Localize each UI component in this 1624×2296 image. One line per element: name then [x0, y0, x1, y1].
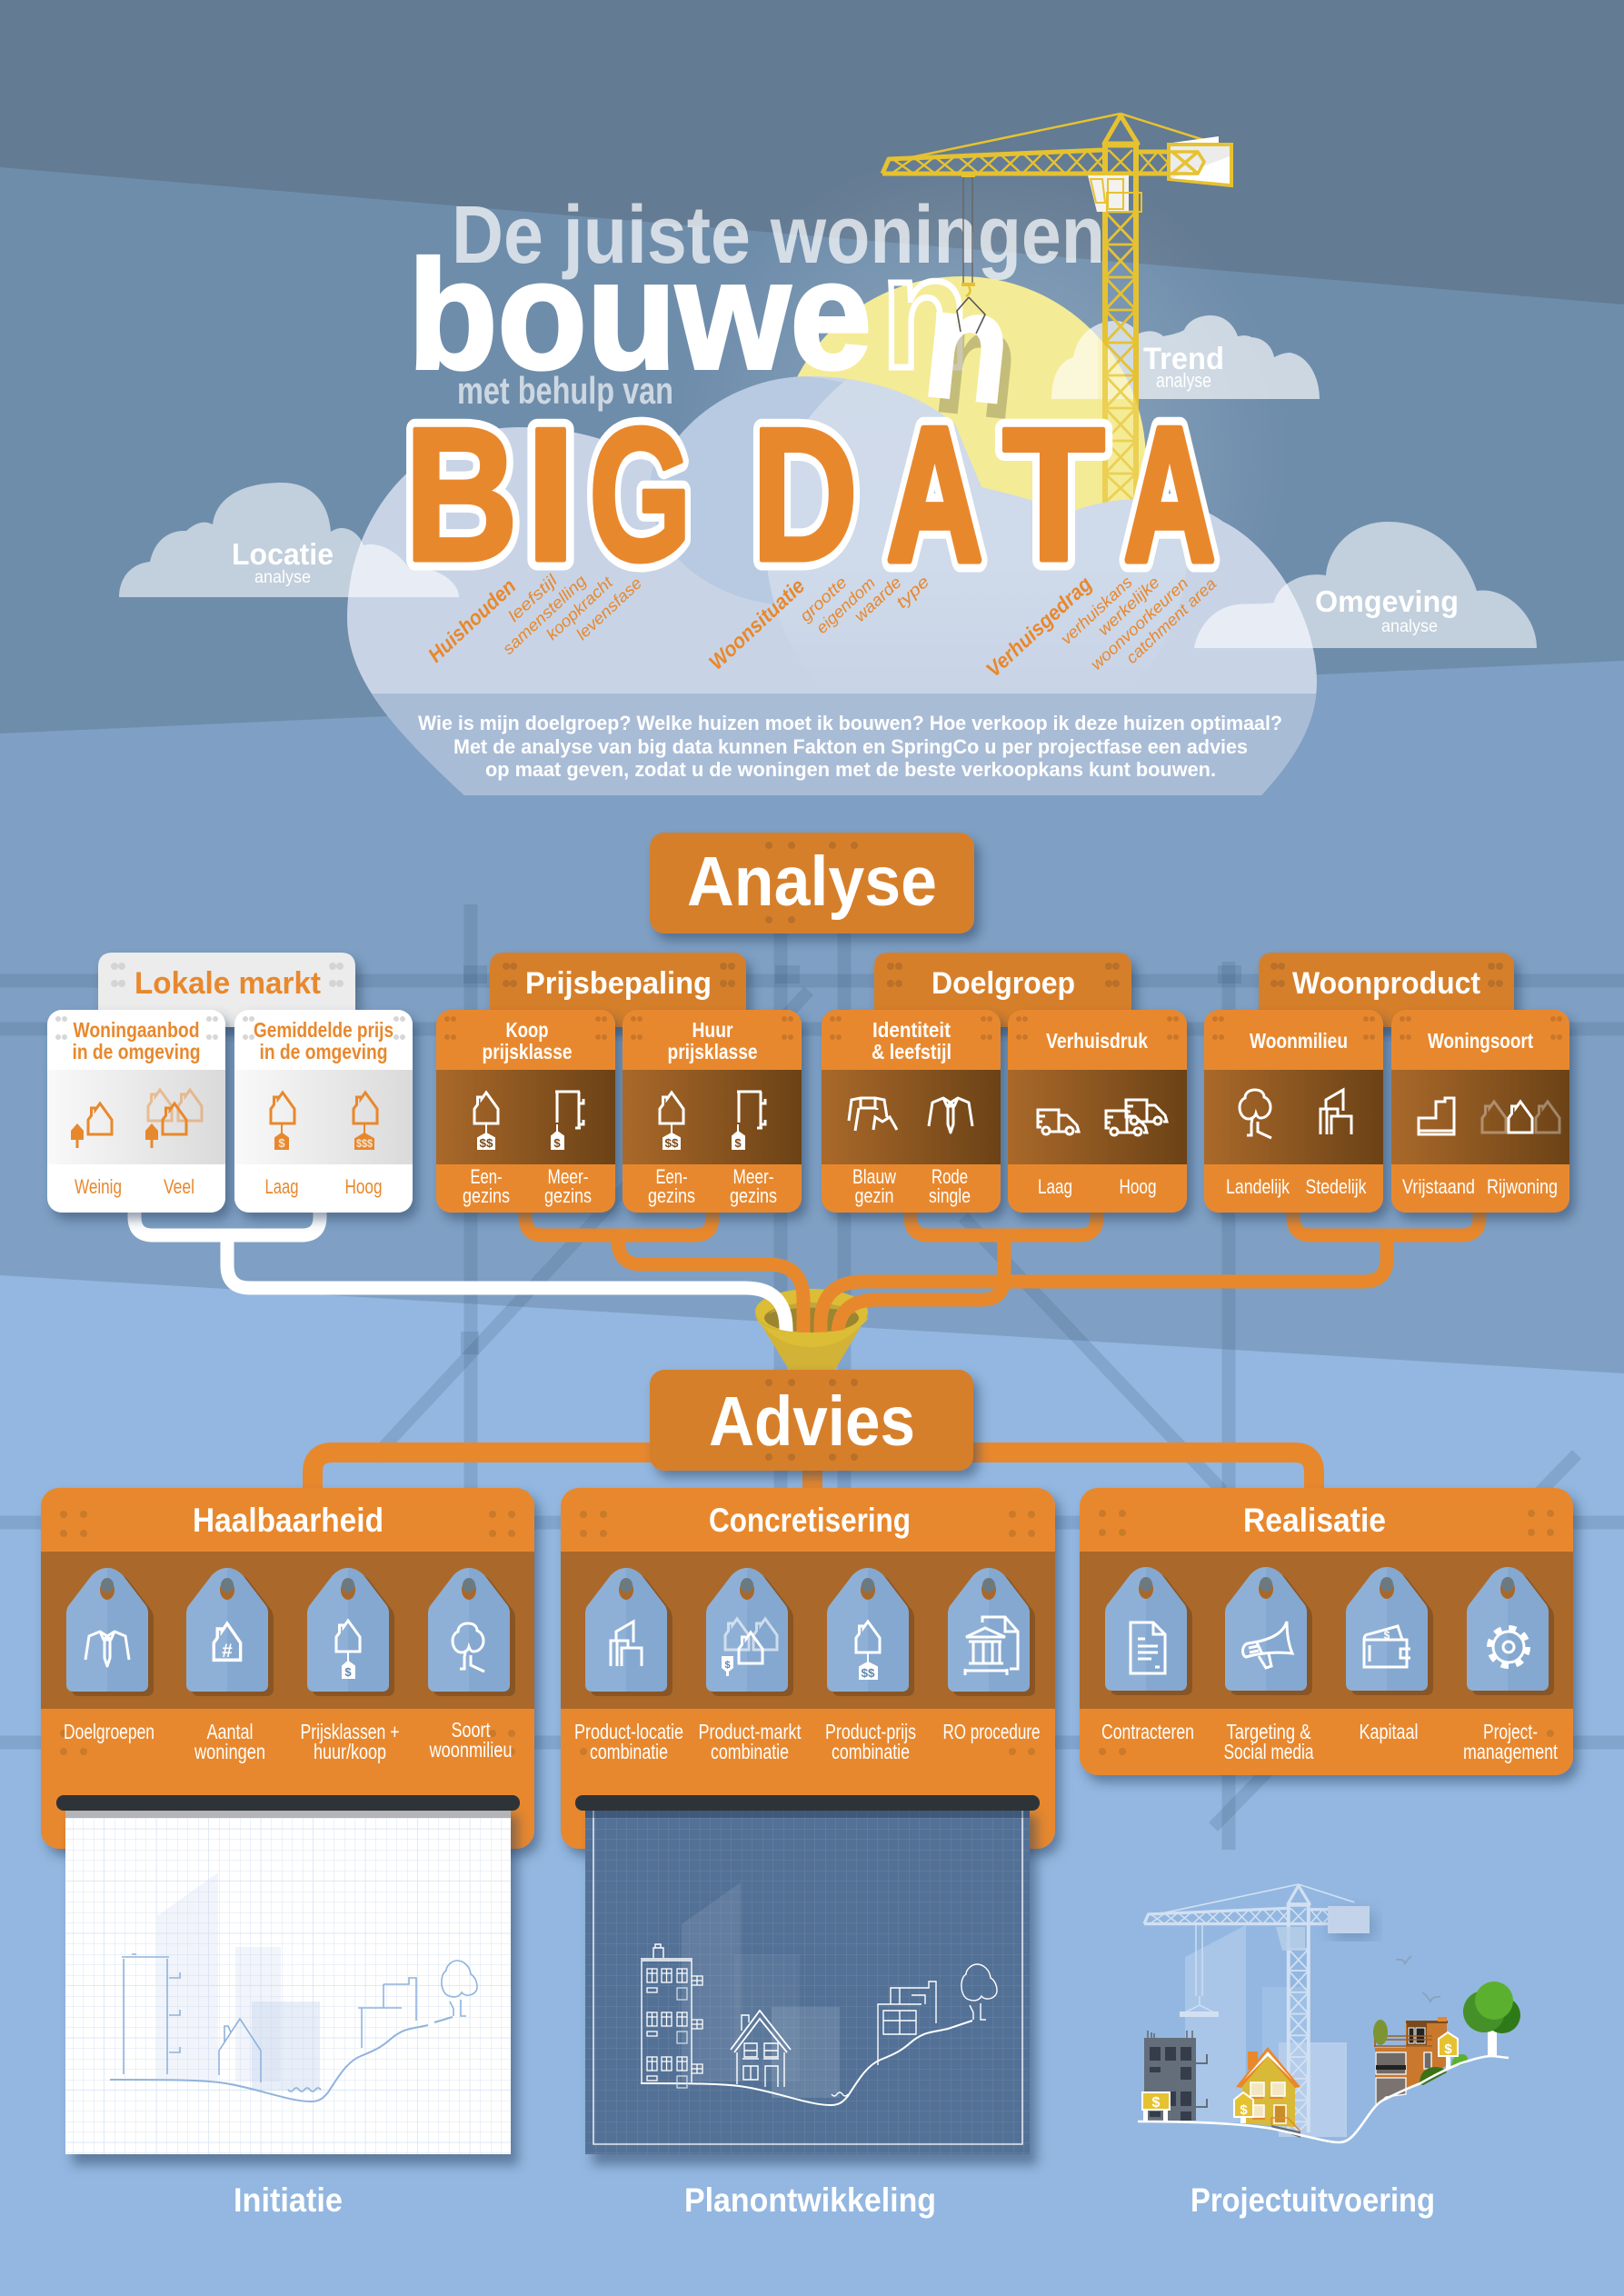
word cloud: huishouden: koopkracht — [543, 573, 617, 644]
sketch shadows — [157, 1872, 281, 2081]
tag: product-markt: $ — [724, 1660, 731, 1671]
card: verhuisdruk: Verhuisdruk — [1046, 1029, 1148, 1053]
phase label: initiatie: Initiatie — [234, 2181, 343, 2219]
panel: realisatie: Social media — [1223, 1740, 1314, 1763]
cloud: omgeving — [1194, 522, 1537, 648]
tag: kapitaal — [1346, 1567, 1433, 1695]
title line: bouwen: bouwe — [408, 229, 872, 402]
crane cabin — [1088, 175, 1129, 212]
tag: prijsklassen — [307, 1568, 394, 1696]
phase label: projectuitvoering: Projectuitvoering — [1191, 2181, 1435, 2219]
big cloud — [347, 376, 1317, 795]
card: huur prijsklasse — [623, 1010, 802, 1213]
icon: multi family price — [552, 1092, 583, 1150]
word cloud: verhuisgedrag: verhuiskans — [1057, 573, 1136, 648]
pipe: prijsbepaling — [525, 1213, 803, 1334]
card: verhuisdruk: Laag — [1038, 1175, 1072, 1198]
BIG DATA: D — [752, 389, 858, 601]
balcony shrub — [1373, 2020, 1388, 2045]
word cloud: woonsituatie: Woonsituatie — [704, 574, 810, 674]
card: huur prijsklasse: Huur — [692, 1018, 733, 1042]
card: huur prijsklasse: gezins — [648, 1184, 695, 1207]
cloud: locatie: analyse — [254, 568, 311, 587]
word cloud: verhuisgedrag: woonvoorkeuren — [1087, 574, 1191, 674]
word cloud: woonsituatie: waarde — [851, 573, 905, 625]
tag: RO procedure — [948, 1568, 1035, 1696]
tab: woonproduct — [1259, 953, 1514, 1027]
card: huur prijsklasse: Meer- — [732, 1165, 774, 1188]
card: gemiddelde prijs: Hoog — [345, 1175, 382, 1198]
word cloud: verhuisgedrag: werkelijke — [1094, 573, 1163, 639]
panel: concretisering — [561, 1488, 1055, 1849]
tab: prijsbepaling — [490, 953, 746, 1027]
card: koop prijsklasse: Koop — [505, 1018, 549, 1042]
word cloud: woonsituatie: eigendom — [812, 574, 879, 637]
panel: haalbaarheid: Prijsklassen + — [300, 1720, 400, 1743]
BIG DATA — [404, 389, 1215, 601]
cloud: omgeving: analyse — [1381, 617, 1438, 636]
panel: concretisering: Concretisering — [709, 1502, 911, 1539]
card: koop prijsklasse: prijsklasse — [482, 1040, 573, 1063]
label: trend analyse: Trend — [1143, 342, 1224, 376]
panel: haalbaarheid: woningen — [194, 1740, 265, 1763]
pipe: lokale markt — [135, 1213, 786, 1333]
pipe: doelgroep — [838, 1213, 1097, 1334]
bushes — [1420, 2067, 1447, 2085]
tab: doelgroep: Doelgroep — [932, 966, 1075, 1001]
label: trend analyse: analyse — [1156, 369, 1211, 392]
card: huur prijsklasse: Een- — [656, 1165, 687, 1188]
card: identiteit en leefstijl: Identiteit — [872, 1018, 951, 1042]
card: gemiddelde prijs: Gemiddelde prijs — [254, 1018, 394, 1042]
BIG DATA: I — [525, 389, 576, 601]
BIG DATA: T — [1002, 389, 1105, 601]
tag: product-prijs — [827, 1568, 914, 1696]
BIG DATA: A — [887, 389, 982, 601]
ghost buildings — [1185, 1925, 1246, 2122]
panel: concretisering: combinatie — [590, 1740, 668, 1763]
panel: haalbaarheid: Aantal — [207, 1720, 253, 1743]
card: gemiddelde prijs: in de omgeving — [260, 1040, 387, 1063]
panel: realisatie: Realisatie — [1243, 1502, 1386, 1539]
word cloud: woonsituatie: type — [892, 573, 932, 612]
card: koop prijsklasse — [436, 1010, 615, 1213]
panel: concretisering: combinatie — [711, 1740, 789, 1763]
word cloud: huishouden: levensfase — [573, 574, 645, 644]
tag: doelgroepen — [66, 1568, 154, 1696]
subtitle: met behulp van: met behulp van — [457, 369, 673, 412]
sheet: planontwikkeling blueprint — [575, 1795, 1040, 2154]
tag: product-markt — [706, 1568, 793, 1696]
card: identiteit en leefstijl: gezin — [854, 1184, 894, 1207]
icon: multi family rent — [732, 1092, 765, 1150]
icon: terraced houses — [1482, 1102, 1559, 1133]
card: verhuisdruk: Hoog — [1120, 1175, 1156, 1198]
word cloud: verhuisgedrag: catchment area — [1122, 574, 1220, 667]
tag: targeting — [1225, 1567, 1312, 1695]
BIG DATA: G — [589, 389, 692, 601]
panel: haalbaarheid — [41, 1488, 534, 1849]
pale crane — [1144, 1884, 1354, 2141]
phase label: planontwikkeling: Planontwikkeling — [684, 2181, 936, 2219]
word cloud: verhuisgedrag — [981, 572, 1220, 682]
tab: woonproduct: Woonproduct — [1292, 966, 1480, 1001]
hanging letter n with shadow: n — [916, 255, 1020, 437]
green tree — [1463, 1982, 1520, 2056]
card: woningaanbod: in de omgeving — [73, 1040, 200, 1063]
icon: single family price — [474, 1093, 498, 1150]
panel: realisatie: Targeting & — [1227, 1720, 1310, 1743]
card: huur prijsklasse: prijsklasse — [667, 1040, 758, 1063]
panel: realisatie: Kapitaal — [1360, 1720, 1418, 1743]
tab: prijsbepaling: Prijsbepaling — [525, 966, 712, 1001]
tag: aantal woningen — [186, 1568, 274, 1696]
tab: doelgroep — [874, 953, 1131, 1027]
tag: soort woonmilieu — [428, 1568, 515, 1696]
tag: product-locatie — [585, 1568, 673, 1696]
icon: detached house — [1419, 1098, 1454, 1134]
BIG DATA: T — [1002, 389, 1105, 601]
card: woningaanbod — [47, 1010, 225, 1213]
panel: concretisering: RO procedure — [943, 1720, 1040, 1743]
tag: kapitaal: $ — [1384, 1629, 1390, 1642]
icon: low price house — [271, 1093, 294, 1150]
card: woningaanbod: Woningaanbod — [73, 1018, 200, 1042]
card: koop prijsklasse: Meer- — [547, 1165, 589, 1188]
cloud: trend — [1051, 315, 1320, 399]
panel: haalbaarheid: Soort — [451, 1718, 491, 1742]
icon: many houses — [145, 1090, 202, 1148]
card: identiteit en leefstijl — [822, 1010, 1001, 1213]
intro paragraph: op maat geven, zodat u de woningen met de beste verkoopkans kunt bouwen. — [485, 758, 1216, 781]
tag: aantal woningen: # — [222, 1641, 233, 1662]
grey apartment block — [1142, 2031, 1207, 2121]
header: Analyse — [650, 833, 974, 933]
word cloud: verhuisgedrag: Verhuisgedrag — [981, 572, 1096, 682]
counterweight — [1169, 145, 1231, 185]
panel: haalbaarheid: woonmilieu — [429, 1738, 513, 1762]
word cloud: woonsituatie: grootte — [796, 573, 851, 625]
word cloud: woonsituatie — [704, 573, 932, 674]
pale counterweight and cabin — [1180, 1906, 1370, 2017]
tab: lokale markt: Lokale markt — [135, 966, 321, 1001]
grey apartment block: $ — [1152, 2095, 1161, 2111]
blueprint drawing — [641, 1944, 997, 2105]
icon: multi family price: $ — [553, 1136, 561, 1150]
icon: one truck — [1038, 1110, 1079, 1134]
panel: haalbaarheid: Doelgroepen — [64, 1720, 154, 1743]
BIG DATA: G — [589, 389, 692, 601]
card: koop prijsklasse: gezins — [463, 1184, 510, 1207]
funnel back — [755, 1289, 868, 1373]
icon: multi family rent: $ — [734, 1136, 742, 1150]
card: woningsoort: Vrijstaand — [1402, 1175, 1475, 1198]
panel: haalbaarheid: Haalbaarheid — [193, 1502, 384, 1539]
card: koop prijsklasse: gezins — [544, 1184, 592, 1207]
tab: lokale markt — [98, 953, 355, 1027]
BIG DATA: B — [404, 389, 518, 601]
label: trend analyse — [1143, 342, 1224, 392]
icon: tree — [1240, 1090, 1271, 1138]
panel: realisatie: Contracteren — [1101, 1720, 1194, 1743]
scene: projectuitvoering — [1138, 1884, 1520, 2142]
sun — [777, 276, 1146, 645]
funnel front — [755, 1312, 868, 1373]
intro paragraph: Wie is mijn doelgroep? Welke huizen moet ik bouwen? Hoe verkoop ik deze huizen optimaal? — [418, 712, 1282, 734]
card: identiteit en leefstijl: Blauw — [852, 1165, 896, 1188]
BIG DATA: D — [752, 389, 858, 601]
card: identiteit en leefstijl: & leefstijl — [872, 1040, 951, 1063]
card: woningsoort — [1391, 1010, 1569, 1213]
icon: business shirt — [929, 1098, 972, 1133]
header: Advies: Advies — [709, 1383, 915, 1461]
card: woningsoort: Woningsoort — [1428, 1029, 1533, 1053]
sale sign — [1143, 2110, 1168, 2121]
card: huur prijsklasse: gezins — [730, 1184, 777, 1207]
blueprint shadows — [682, 1882, 741, 2081]
hanging letter n with shadow: n — [925, 271, 1029, 454]
sheet: initiatie sketch paper — [56, 1795, 520, 2154]
intro paragraph: Met de analyse van big data kunnen Fakton en SpringCo u per projectfase een advies — [453, 735, 1248, 758]
orange townhouse — [1373, 2017, 1468, 2106]
card: gemiddelde prijs: Laag — [265, 1175, 298, 1198]
panel: realisatie: Project- — [1483, 1720, 1538, 1743]
roller — [56, 1795, 520, 1811]
word cloud: huishouden: leefstijl — [504, 570, 562, 625]
cloud: omgeving: Omgeving — [1315, 584, 1459, 618]
card: verhuisdruk — [1008, 1010, 1187, 1213]
card: gemiddelde prijs — [234, 1010, 413, 1213]
BIG DATA: B — [404, 389, 518, 601]
card: identiteit en leefstijl: single — [929, 1184, 971, 1207]
tag: contracteren — [1105, 1567, 1192, 1695]
icon: high price house: $$$ — [356, 1137, 373, 1150]
orange townhouse: $ — [1444, 2041, 1452, 2057]
main crane — [882, 114, 1231, 503]
BIG DATA: A — [887, 389, 982, 601]
yellow house — [1234, 2047, 1300, 2138]
tag: product-prijs: $$ — [862, 1666, 875, 1680]
word cloud: huishouden — [423, 570, 645, 667]
icon: few houses — [71, 1103, 112, 1148]
BIG DATA: I — [525, 389, 576, 601]
cloud: locatie — [119, 483, 459, 597]
icon: city blocks — [1320, 1090, 1351, 1134]
cables and hook — [963, 175, 972, 284]
panel: concretisering: combinatie — [832, 1740, 910, 1763]
card: woonmilieu: Landelijk — [1226, 1175, 1290, 1198]
icon: single family price: $$ — [480, 1136, 493, 1150]
birds — [1396, 1956, 1440, 2002]
BIG DATA: A — [1124, 389, 1215, 601]
card: woonmilieu — [1204, 1010, 1383, 1213]
card: identiteit en leefstijl: Rode — [932, 1165, 968, 1188]
icon: two trucks — [1106, 1100, 1167, 1135]
header: Analyse: Analyse — [687, 843, 937, 921]
crane tinted behind the sun — [1098, 336, 1143, 503]
tag: project-management — [1467, 1567, 1554, 1695]
panel: concretisering: Product-markt — [698, 1720, 802, 1743]
connector pipes: advice — [313, 1452, 1314, 1491]
yellow house: $ — [1240, 2102, 1248, 2118]
scaffolding — [0, 904, 1624, 1850]
cloud: locatie: Locatie — [232, 537, 334, 571]
roller — [575, 1795, 1040, 1811]
title line: De juiste woningen: De juiste woningen — [452, 190, 1105, 281]
card: woonmilieu: Stedelijk — [1305, 1175, 1367, 1198]
card: woonmilieu: Woonmilieu — [1250, 1029, 1348, 1053]
card: woningsoort: Rijwoning — [1487, 1175, 1558, 1198]
card: koop prijsklasse: Een- — [471, 1165, 502, 1188]
card: woningaanbod: Veel — [164, 1175, 194, 1198]
word cloud: huishouden: samenstelling — [499, 572, 590, 658]
icon: single family rent — [660, 1093, 683, 1150]
pipe: woonproduct — [821, 1213, 1480, 1334]
ground line — [1138, 2056, 1509, 2142]
header: Advies — [650, 1370, 973, 1471]
panel: realisatie: management — [1463, 1740, 1558, 1763]
panel: concretisering: Product-locatie — [574, 1720, 683, 1743]
icon: low price house: $ — [278, 1136, 285, 1150]
BIG DATA: A — [1124, 389, 1215, 601]
panel: realisatie — [1080, 1488, 1573, 1775]
connector pipes: analysis to funnel — [135, 1213, 1480, 1334]
tag: prijsklassen: $ — [344, 1665, 352, 1679]
townhouse price sign — [1446, 2056, 1450, 2069]
sketch lines — [110, 1954, 477, 2101]
card: woningaanbod: Weinig — [75, 1175, 122, 1198]
house price sign — [1240, 2116, 1246, 2123]
outlined n: n — [882, 224, 969, 402]
icon: family shirts — [849, 1098, 897, 1131]
word cloud: huishouden: Huishouden — [423, 574, 521, 667]
panel: haalbaarheid: huur/koop — [314, 1740, 386, 1763]
panel: concretisering: Product-prijs — [825, 1720, 916, 1743]
icon: high price house — [354, 1093, 377, 1150]
intro paragraph — [418, 712, 1282, 781]
icon: single family rent: $$ — [665, 1136, 679, 1150]
